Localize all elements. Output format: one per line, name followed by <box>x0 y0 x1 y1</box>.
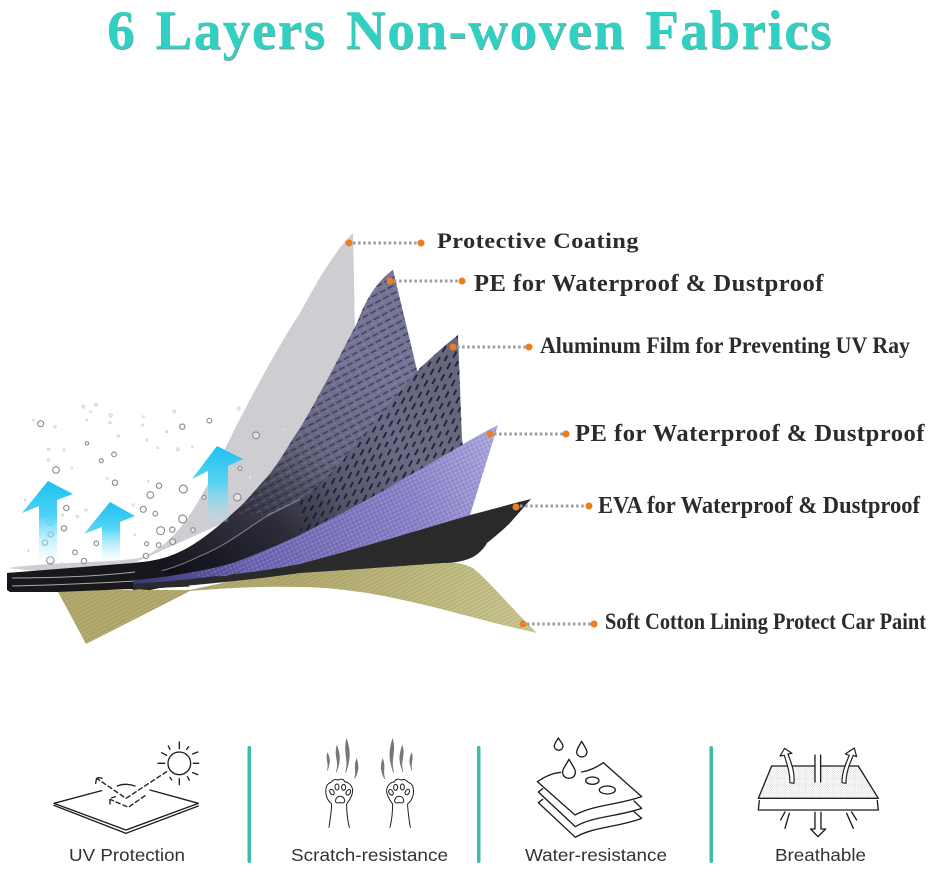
fabric layers illustration <box>7 233 537 644</box>
icon: breathable fabric <box>758 748 878 837</box>
title: 6 Layers Non-woven Fabrics <box>108 0 834 61</box>
feature: scratch-resistance <box>291 739 448 865</box>
layer: protective coating <box>8 233 355 578</box>
layer: EVA black <box>133 499 531 590</box>
divider 1 <box>248 746 251 863</box>
layer: soft cotton lining <box>57 562 537 644</box>
bottom edge stack <box>7 564 190 592</box>
arrow 3 <box>192 446 243 522</box>
feature: water-resistance <box>525 738 667 865</box>
layer: purple PE film <box>133 425 498 584</box>
divider 3 <box>710 746 713 863</box>
feature: breathable <box>758 748 878 865</box>
callout: protective coating <box>346 228 639 253</box>
water droplets <box>24 403 286 564</box>
arrow 2 <box>84 502 135 562</box>
callout: PE lower: PE for Waterproof & Dustproof <box>575 421 926 447</box>
label: Scratch-resistance <box>291 845 448 865</box>
title: 6 Layers Non-woven Fabrics <box>107 0 833 60</box>
callout: EVA: EVA for Waterproof & Dustproof <box>598 493 921 519</box>
callout: aluminum film: Aluminum Film for Preventing UV Ray <box>540 333 910 358</box>
label: Water-resistance <box>525 845 667 865</box>
divider 2 <box>477 746 480 863</box>
layer: aluminum film <box>7 335 470 590</box>
feature: UV protection <box>54 742 199 865</box>
icon: sun and board <box>54 742 199 833</box>
icon: cat paws <box>326 739 414 827</box>
label: UV Protection <box>69 845 185 865</box>
layer: PE film upper <box>7 270 430 590</box>
arrow 1 <box>22 481 73 560</box>
callout: PE upper: PE for Waterproof & Dustproof <box>474 271 825 297</box>
label: Breathable <box>775 845 866 865</box>
icon: water on layered fabric <box>537 738 642 837</box>
callout: protective coating: Protective Coating <box>437 228 639 253</box>
arrows: rising vapour <box>22 446 243 562</box>
